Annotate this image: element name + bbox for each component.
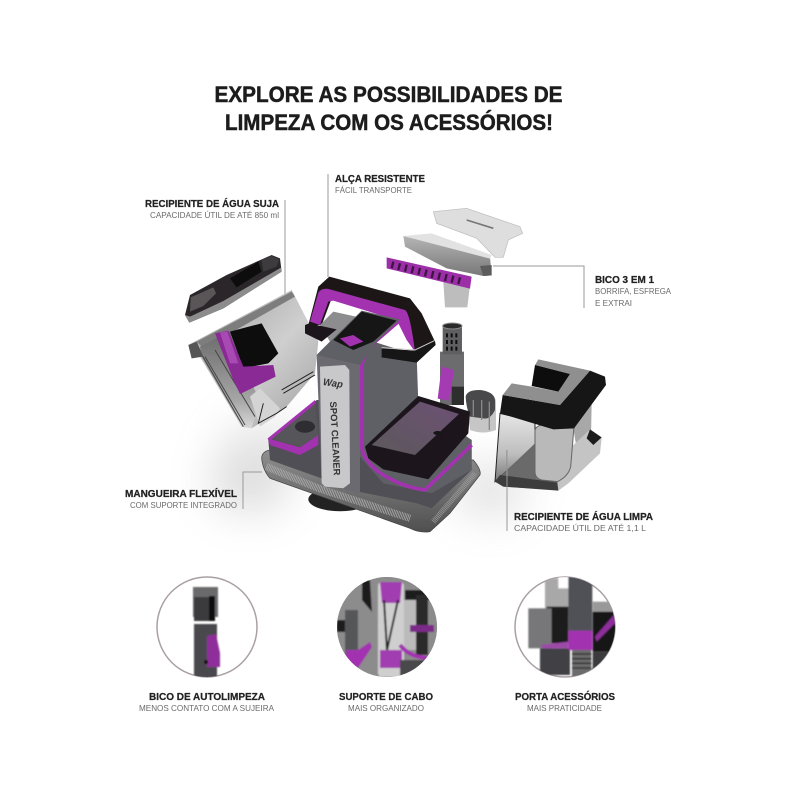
- middle nozzle part: [403, 233, 492, 307]
- lower tube: [440, 352, 464, 405]
- caption: self-cleaning nozzle: MENOS CONTATO COM A SUJEIRA: [139, 703, 274, 713]
- caption: accessory holder: [515, 690, 615, 713]
- exploded 3-in-1 nozzle: [387, 208, 523, 307]
- callout: flexible hose: [125, 472, 262, 510]
- left purple ledge: [268, 400, 318, 455]
- callout: 3-in-1 nozzle: BICO 3 EM 1: [595, 274, 654, 286]
- callout: clean water tank: RECIPIENTE DE ÁGUA LIMPA: [514, 510, 653, 523]
- tank lid: [500, 359, 606, 429]
- black water tray: [365, 396, 470, 479]
- clear tank body: [495, 413, 574, 491]
- handle: [305, 277, 436, 363]
- callout: flexible hose: COM SUPORTE INTEGRADO: [130, 500, 237, 510]
- callout: dirty water tank: RECIPIENTE DE ÁGUA SUJA: [145, 197, 279, 210]
- base: [268, 400, 472, 508]
- tank platform: [530, 429, 602, 491]
- caption: cable support: [339, 691, 433, 713]
- purple trim: [362, 322, 472, 490]
- under-shadow disc: [308, 487, 372, 511]
- caption: cable support: SUPORTE DE CABO: [339, 691, 433, 703]
- top translucent nozzle part: [433, 208, 523, 257]
- title: EXPLORE AS POSSIBILIDADES DE: [214, 82, 562, 107]
- tank body: [188, 290, 318, 428]
- top panel: [317, 311, 400, 365]
- body front: [317, 342, 360, 493]
- callout: 3-in-1 nozzle: BORRIFA, ESFREGA: [595, 286, 671, 296]
- infographic canvas: [126, 86, 671, 711]
- callout: handle: [328, 173, 425, 277]
- tank lid: [185, 255, 282, 323]
- caption: accessory holder: PORTA ACESSÓRIOS: [515, 690, 615, 703]
- purple scrub brush: [387, 257, 472, 289]
- callout: handle: ALÇA RESISTENTE: [335, 173, 425, 185]
- brand wordmark: Wap: [322, 377, 344, 391]
- internal columns: [572, 403, 592, 458]
- feature circle: accessory holder: [515, 577, 617, 678]
- exploded dirty water tank: [185, 255, 318, 428]
- callout: handle: FÁCIL TRANSPORTE: [335, 185, 412, 195]
- callout: dirty water tank: [145, 197, 285, 340]
- front label: [320, 365, 350, 488]
- product name: SPOT CLEANER: [328, 401, 342, 476]
- callout: 3-in-1 nozzle: E EXTRAI: [595, 298, 632, 308]
- feature circle: cable support: [337, 577, 437, 680]
- title: LIMPEZA COM OS ACESSÓRIOS!: [225, 110, 553, 135]
- caption: self-cleaning nozzle: [139, 691, 274, 713]
- brush skirt: [262, 450, 480, 532]
- callout: clean water tank: CAPACIDADE ÚTIL DE ATÉ 1,1 L: [514, 523, 646, 533]
- callout: flexible hose: MANGUEIRA FLEXÍVEL: [125, 487, 238, 500]
- callout: dirty water tank: CAPACIDADE ÚTIL DE ATÉ 850 ml: [150, 210, 279, 220]
- caption: self-cleaning nozzle: BICO DE AUTOLIMPEZA: [149, 691, 265, 703]
- caption: cable support: MAIS ORGANIZADO: [348, 703, 424, 713]
- side accessory tube and cap: [438, 323, 496, 432]
- title: [214, 82, 562, 135]
- exploded clean water tank: [495, 359, 606, 491]
- purple clip: [438, 367, 454, 401]
- leader line over clean tank: [506, 450, 508, 531]
- caption: accessory holder: MAIS PRATICIDADE: [527, 703, 602, 713]
- floor shadow: [210, 424, 526, 516]
- body side: [358, 342, 472, 493]
- cap: [466, 390, 496, 432]
- callout: 3-in-1 nozzle: [493, 266, 671, 308]
- perforated tube top: [443, 323, 462, 354]
- main spot cleaner unit: [262, 277, 480, 532]
- callout: clean water tank: [514, 510, 653, 533]
- feature circle: self-cleaning nozzle: [157, 577, 257, 679]
